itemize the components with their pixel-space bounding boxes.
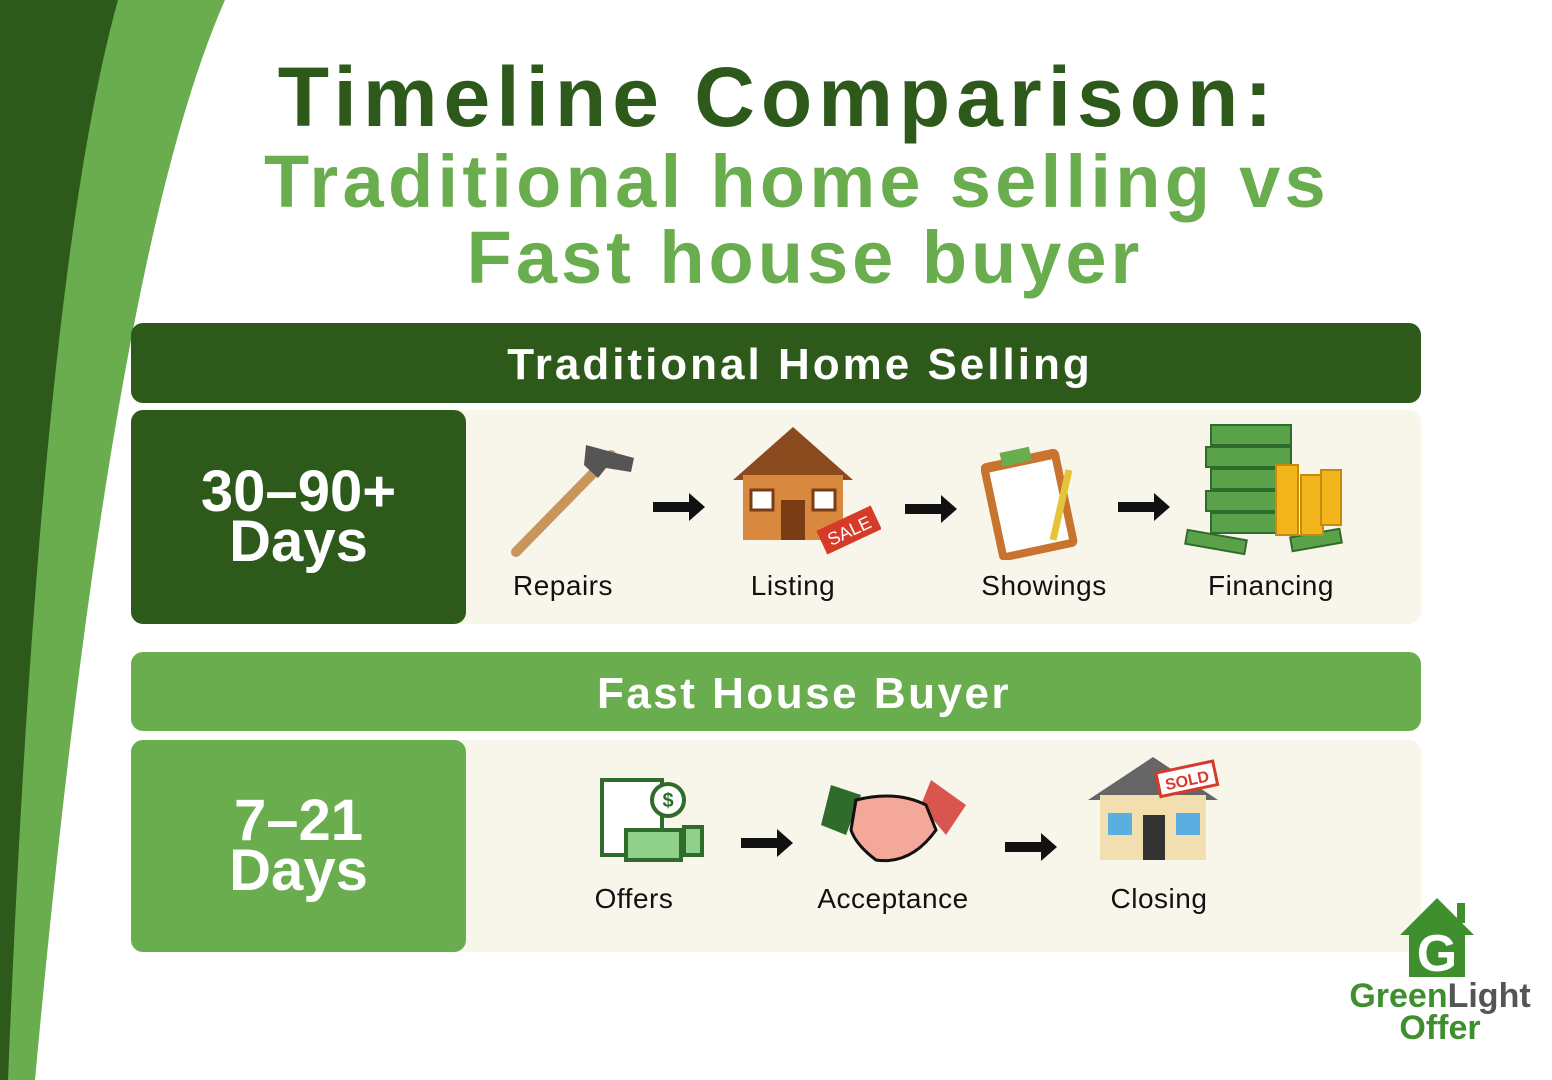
panel: traditional — [131, 410, 1421, 624]
days box: 7-21: 7–21 — [234, 788, 363, 853]
icon: hammer — [511, 445, 634, 557]
icon: money — [1184, 424, 1343, 556]
header: traditional — [131, 323, 1421, 403]
arrow — [653, 493, 705, 521]
label: acceptance: Acceptance — [817, 883, 969, 914]
label: offers: Offers — [595, 883, 673, 914]
header: fast buyer — [131, 652, 1421, 731]
header: fast buyer: Fast House Buyer — [597, 669, 1011, 718]
days box: 7-21 — [131, 740, 466, 952]
icon: sold house — [1088, 757, 1220, 860]
icon: offers: $ — [662, 790, 674, 812]
label: closing: Closing — [1111, 883, 1207, 914]
arrow — [1005, 833, 1057, 861]
icon: sold house: SOLD — [1164, 768, 1211, 794]
title line 1: Timeline Comparison: — [278, 50, 1278, 144]
background swoosh — [0, 0, 225, 1080]
title line 2 — [264, 140, 1330, 299]
icon: logo house — [1400, 898, 1474, 980]
icon: clipboard — [981, 446, 1078, 560]
arrow — [741, 829, 793, 857]
icon: offers — [600, 778, 704, 862]
arrow — [1118, 493, 1170, 521]
panel: fast buyer — [131, 740, 1421, 952]
arrow — [905, 495, 957, 523]
icon: handshake — [821, 780, 966, 862]
label: repairs: Repairs — [513, 570, 613, 601]
title line 2: Traditional home selling vs — [264, 140, 1330, 223]
label: listing: Listing — [751, 570, 835, 601]
icon: house for sale: SALE — [824, 512, 875, 550]
logo text: Offer — [1399, 1009, 1481, 1047]
days box: 30-90+ — [131, 410, 466, 624]
days box: 7-21: Days — [229, 838, 368, 903]
logo text — [1349, 977, 1531, 1047]
logo text: GreenLight — [1349, 977, 1531, 1015]
days box: 30-90+: 30–90+ — [201, 459, 396, 524]
icon: house for sale — [733, 427, 881, 554]
header: traditional: Traditional Home Selling — [507, 340, 1093, 389]
label: showings: Showings — [981, 570, 1107, 601]
days box: 30-90+: Days — [229, 509, 368, 574]
logo — [1349, 898, 1531, 1047]
label: financing: Financing — [1208, 570, 1334, 601]
title line 2: Fast house buyer — [467, 216, 1143, 299]
